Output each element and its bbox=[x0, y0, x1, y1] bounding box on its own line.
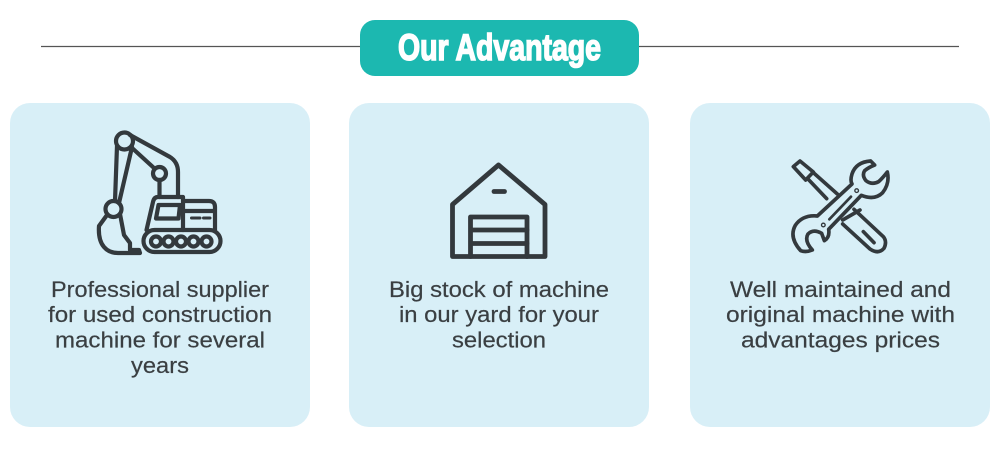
icon: screwdriver and wrench bbox=[793, 161, 888, 252]
text: supplier description: years bbox=[131, 353, 189, 378]
text: maintained description: Well maintained and bbox=[730, 277, 951, 302]
title banner bbox=[360, 20, 639, 76]
text: supplier description: for used construction bbox=[48, 302, 272, 327]
panel: professional supplier bbox=[10, 103, 310, 427]
text: maintained description bbox=[726, 277, 955, 352]
panel: well maintained bbox=[690, 103, 990, 427]
text: stock description: in our yard for your bbox=[399, 302, 600, 327]
text: supplier description: Professional supplier bbox=[51, 277, 270, 302]
text: supplier description bbox=[48, 277, 272, 378]
text: maintained description: original machine with bbox=[726, 302, 955, 327]
text: stock description: Big stock of machine bbox=[389, 277, 609, 302]
text: stock description bbox=[389, 277, 609, 352]
text: supplier description: machine for several bbox=[55, 328, 265, 352]
text: maintained description: advantages prices bbox=[741, 328, 940, 352]
icon: garage bbox=[452, 165, 545, 256]
icon: excavator bbox=[99, 132, 220, 253]
title banner: Our Advantage bbox=[398, 27, 601, 68]
panel: big stock bbox=[349, 103, 649, 427]
text: stock description: selection bbox=[452, 328, 546, 352]
